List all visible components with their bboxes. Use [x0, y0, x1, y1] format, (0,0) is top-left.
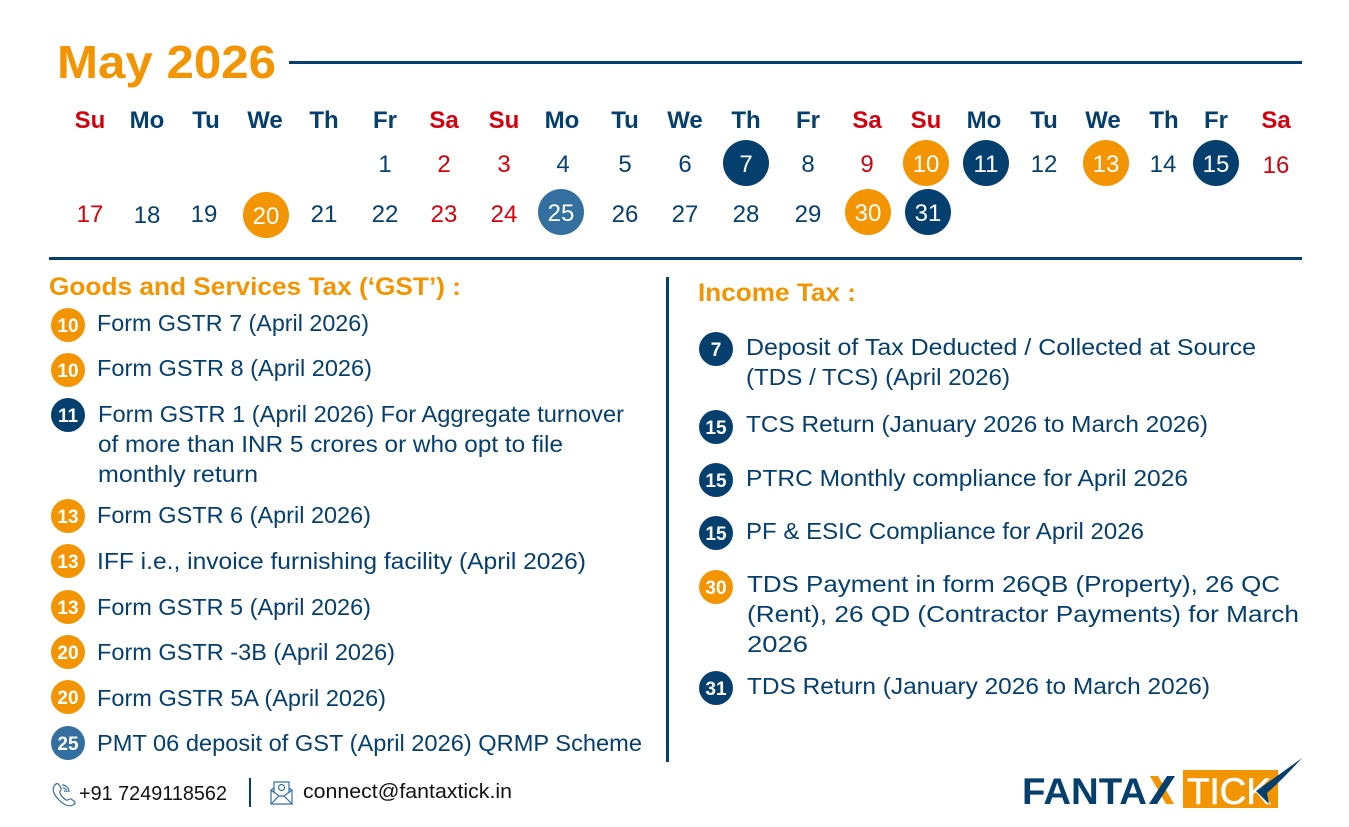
- GST item: GSTR 8: [51, 353, 372, 387]
- icon: phone: [53, 784, 75, 806]
- GST item: GSTR 7: 10: [57, 316, 79, 337]
- GST item: GSTR 1: [51, 398, 624, 487]
- date row 2: 26: [612, 201, 638, 228]
- tax item: PTRC: 15: [705, 471, 727, 492]
- date row 1: 14: [1150, 151, 1176, 178]
- heading: Income Tax: Income Tax :: [698, 279, 856, 307]
- GST item: GSTR 1: Form GSTR 1 (April 2026) For Aggregate turnover: [98, 401, 624, 427]
- date row 1: 3: [497, 151, 511, 178]
- GST item: GSTR 1: of more than INR 5 crores or who opt to file: [98, 431, 563, 457]
- GST item: GSTR 1: 11: [58, 406, 78, 427]
- date row 1: 10: [913, 151, 939, 178]
- tax item: TDS/TCS deposit: 7: [711, 340, 721, 361]
- GST item: IFF: 13: [57, 552, 79, 573]
- date row 1: [378, 140, 1289, 186]
- tax item: PTRC: [699, 463, 1188, 497]
- date row 2: 23: [431, 201, 457, 228]
- date row 2: 24: [491, 201, 517, 228]
- GST item: IFF: IFF i.e., invoice furnishing facility (April 2026): [97, 548, 586, 574]
- tax item: TDS return: 31: [705, 679, 727, 700]
- GST item: GSTR 1: monthly return: [98, 461, 258, 487]
- weekday headers: Su: [911, 107, 941, 134]
- weekday headers: Sa: [429, 107, 459, 134]
- GST item: IFF: [51, 544, 586, 578]
- date row 2: 28: [733, 201, 759, 228]
- weekday headers: Su: [75, 107, 105, 134]
- tax item: TCS return: [699, 410, 1208, 444]
- weekday headers: Th: [731, 107, 761, 134]
- date row 1: 8: [801, 151, 815, 178]
- GST item: GSTR 6: Form GSTR 6 (April 2026): [97, 502, 371, 528]
- GST item: PMT 06: 25: [57, 734, 79, 755]
- date row 1: 13: [1093, 151, 1119, 178]
- weekday headers: Mo: [545, 107, 579, 134]
- date row 1: 15: [1203, 151, 1229, 178]
- date row 2: 22: [372, 201, 398, 228]
- panel: Income Tax: [698, 279, 1299, 705]
- heading: GST: Goods and Services Tax (‘GST’) :: [49, 273, 461, 301]
- logo: FANTA: [1022, 771, 1147, 812]
- weekday headers: Tu: [611, 107, 639, 134]
- calendar: [75, 107, 1291, 238]
- GST item: GSTR 7: Form GSTR 7 (April 2026): [97, 310, 369, 336]
- weekday headers: Th: [1149, 107, 1179, 134]
- date row 2: [77, 189, 951, 238]
- date row 2: 27: [672, 201, 698, 228]
- date row 2: 29: [795, 201, 821, 228]
- GST item: GSTR 5A: [51, 680, 386, 714]
- logo: [1022, 758, 1302, 812]
- weekday headers: Tu: [1030, 107, 1058, 134]
- date row 2: 20: [253, 203, 279, 230]
- weekday headers: We: [247, 107, 283, 134]
- weekday headers: [75, 107, 1291, 134]
- tax item: TCS return: 15: [705, 418, 727, 439]
- date row 1: 4: [556, 151, 570, 178]
- GST item: GSTR 5A: Form GSTR 5A (April 2026): [97, 685, 386, 711]
- title: [57, 36, 1302, 88]
- tax item: TDS payment: TDS Payment in form 26QB (Property), 26 QC: [747, 571, 1280, 597]
- GST item: GSTR 5A: 20: [57, 688, 79, 709]
- date row 2: 25: [548, 200, 574, 227]
- weekday headers: Sa: [852, 107, 882, 134]
- date row 1: 1: [378, 151, 392, 178]
- date row 2: 31: [915, 200, 941, 227]
- date row 1: 12: [1031, 151, 1057, 178]
- footer contact: [53, 778, 512, 807]
- GST item: GSTR 7: [51, 308, 369, 342]
- tax item: TDS return: [699, 671, 1210, 705]
- weekday headers: Fr: [796, 107, 820, 134]
- date row 2: 19: [191, 201, 217, 228]
- tax item: TDS payment: [699, 570, 1299, 657]
- tax item: TDS payment: 30: [705, 578, 727, 599]
- tax item: PF ESIC: [699, 516, 1144, 550]
- panel: GST: [49, 273, 642, 760]
- tax item: TCS return: TCS Return (January 2026 to March 2026): [746, 411, 1208, 437]
- date row 1: 11: [974, 151, 998, 178]
- date row 1: 6: [678, 151, 692, 178]
- weekday headers: Fr: [373, 107, 397, 134]
- tax item: TDS/TCS deposit: Deposit of Tax Deducted / Collected at Source: [746, 334, 1256, 360]
- date row 1: 7: [739, 151, 753, 178]
- tax item: TDS payment: (Rent), 26 QD (Contractor Payments) for March: [747, 601, 1299, 627]
- GST item: GSTR 8: Form GSTR 8 (April 2026): [97, 355, 372, 381]
- weekday headers: We: [667, 107, 703, 134]
- weekday headers: Tu: [192, 107, 220, 134]
- logo: TICK: [1187, 771, 1271, 812]
- date row 2: 18: [134, 202, 160, 229]
- tax item: PF ESIC: 15: [705, 524, 727, 545]
- weekday headers: Su: [489, 107, 519, 134]
- GST item: GSTR 5: Form GSTR 5 (April 2026): [97, 594, 371, 620]
- GST item: GSTR 6: 13: [57, 507, 79, 528]
- GST item: GSTR 8: 10: [57, 361, 79, 382]
- title: May 2026: [57, 36, 276, 88]
- GST item: PMT 06: PMT 06 deposit of GST (April 2026) QRMP Scheme: [97, 730, 642, 756]
- GST item: PMT 06: [51, 726, 642, 760]
- weekday headers: Mo: [130, 107, 164, 134]
- date row 2: 21: [311, 201, 337, 228]
- GST item: GSTR 5: 13: [57, 598, 79, 619]
- date row 1: 5: [618, 151, 632, 178]
- date row 1: 16: [1263, 152, 1289, 179]
- tax item: PTRC: PTRC Monthly compliance for April 2026: [746, 465, 1188, 491]
- tax item: TDS/TCS deposit: [699, 332, 1256, 390]
- email address: connect@fantaxtick.in: [303, 780, 512, 803]
- weekday headers: We: [1085, 107, 1121, 134]
- date row 2: 30: [855, 200, 881, 227]
- GST item: GSTR 3B: 20: [57, 643, 79, 664]
- weekday headers: Th: [309, 107, 339, 134]
- phone number: +91 7249118562: [79, 782, 227, 805]
- date row 2: 17: [77, 201, 103, 228]
- date row 1: 2: [437, 151, 451, 178]
- weekday headers: Sa: [1261, 107, 1291, 134]
- tax item: PF ESIC: PF & ESIC Compliance for April 2026: [746, 518, 1144, 544]
- GST item: GSTR 3B: [51, 635, 395, 669]
- GST item: GSTR 3B: Form GSTR -3B (April 2026): [97, 639, 395, 665]
- tax item: TDS/TCS deposit: (TDS / TCS) (April 2026): [746, 364, 1010, 390]
- tax item: TDS return: TDS Return (January 2026 to March 2026): [747, 673, 1210, 699]
- GST item: GSTR 5: [51, 590, 371, 624]
- tax item: TDS payment: 2026: [747, 631, 808, 657]
- weekday headers: Mo: [967, 107, 1001, 134]
- icon: email: [271, 782, 292, 804]
- GST item: GSTR 6: [51, 499, 371, 533]
- weekday headers: Fr: [1204, 107, 1228, 134]
- date row 1: 9: [860, 151, 874, 178]
